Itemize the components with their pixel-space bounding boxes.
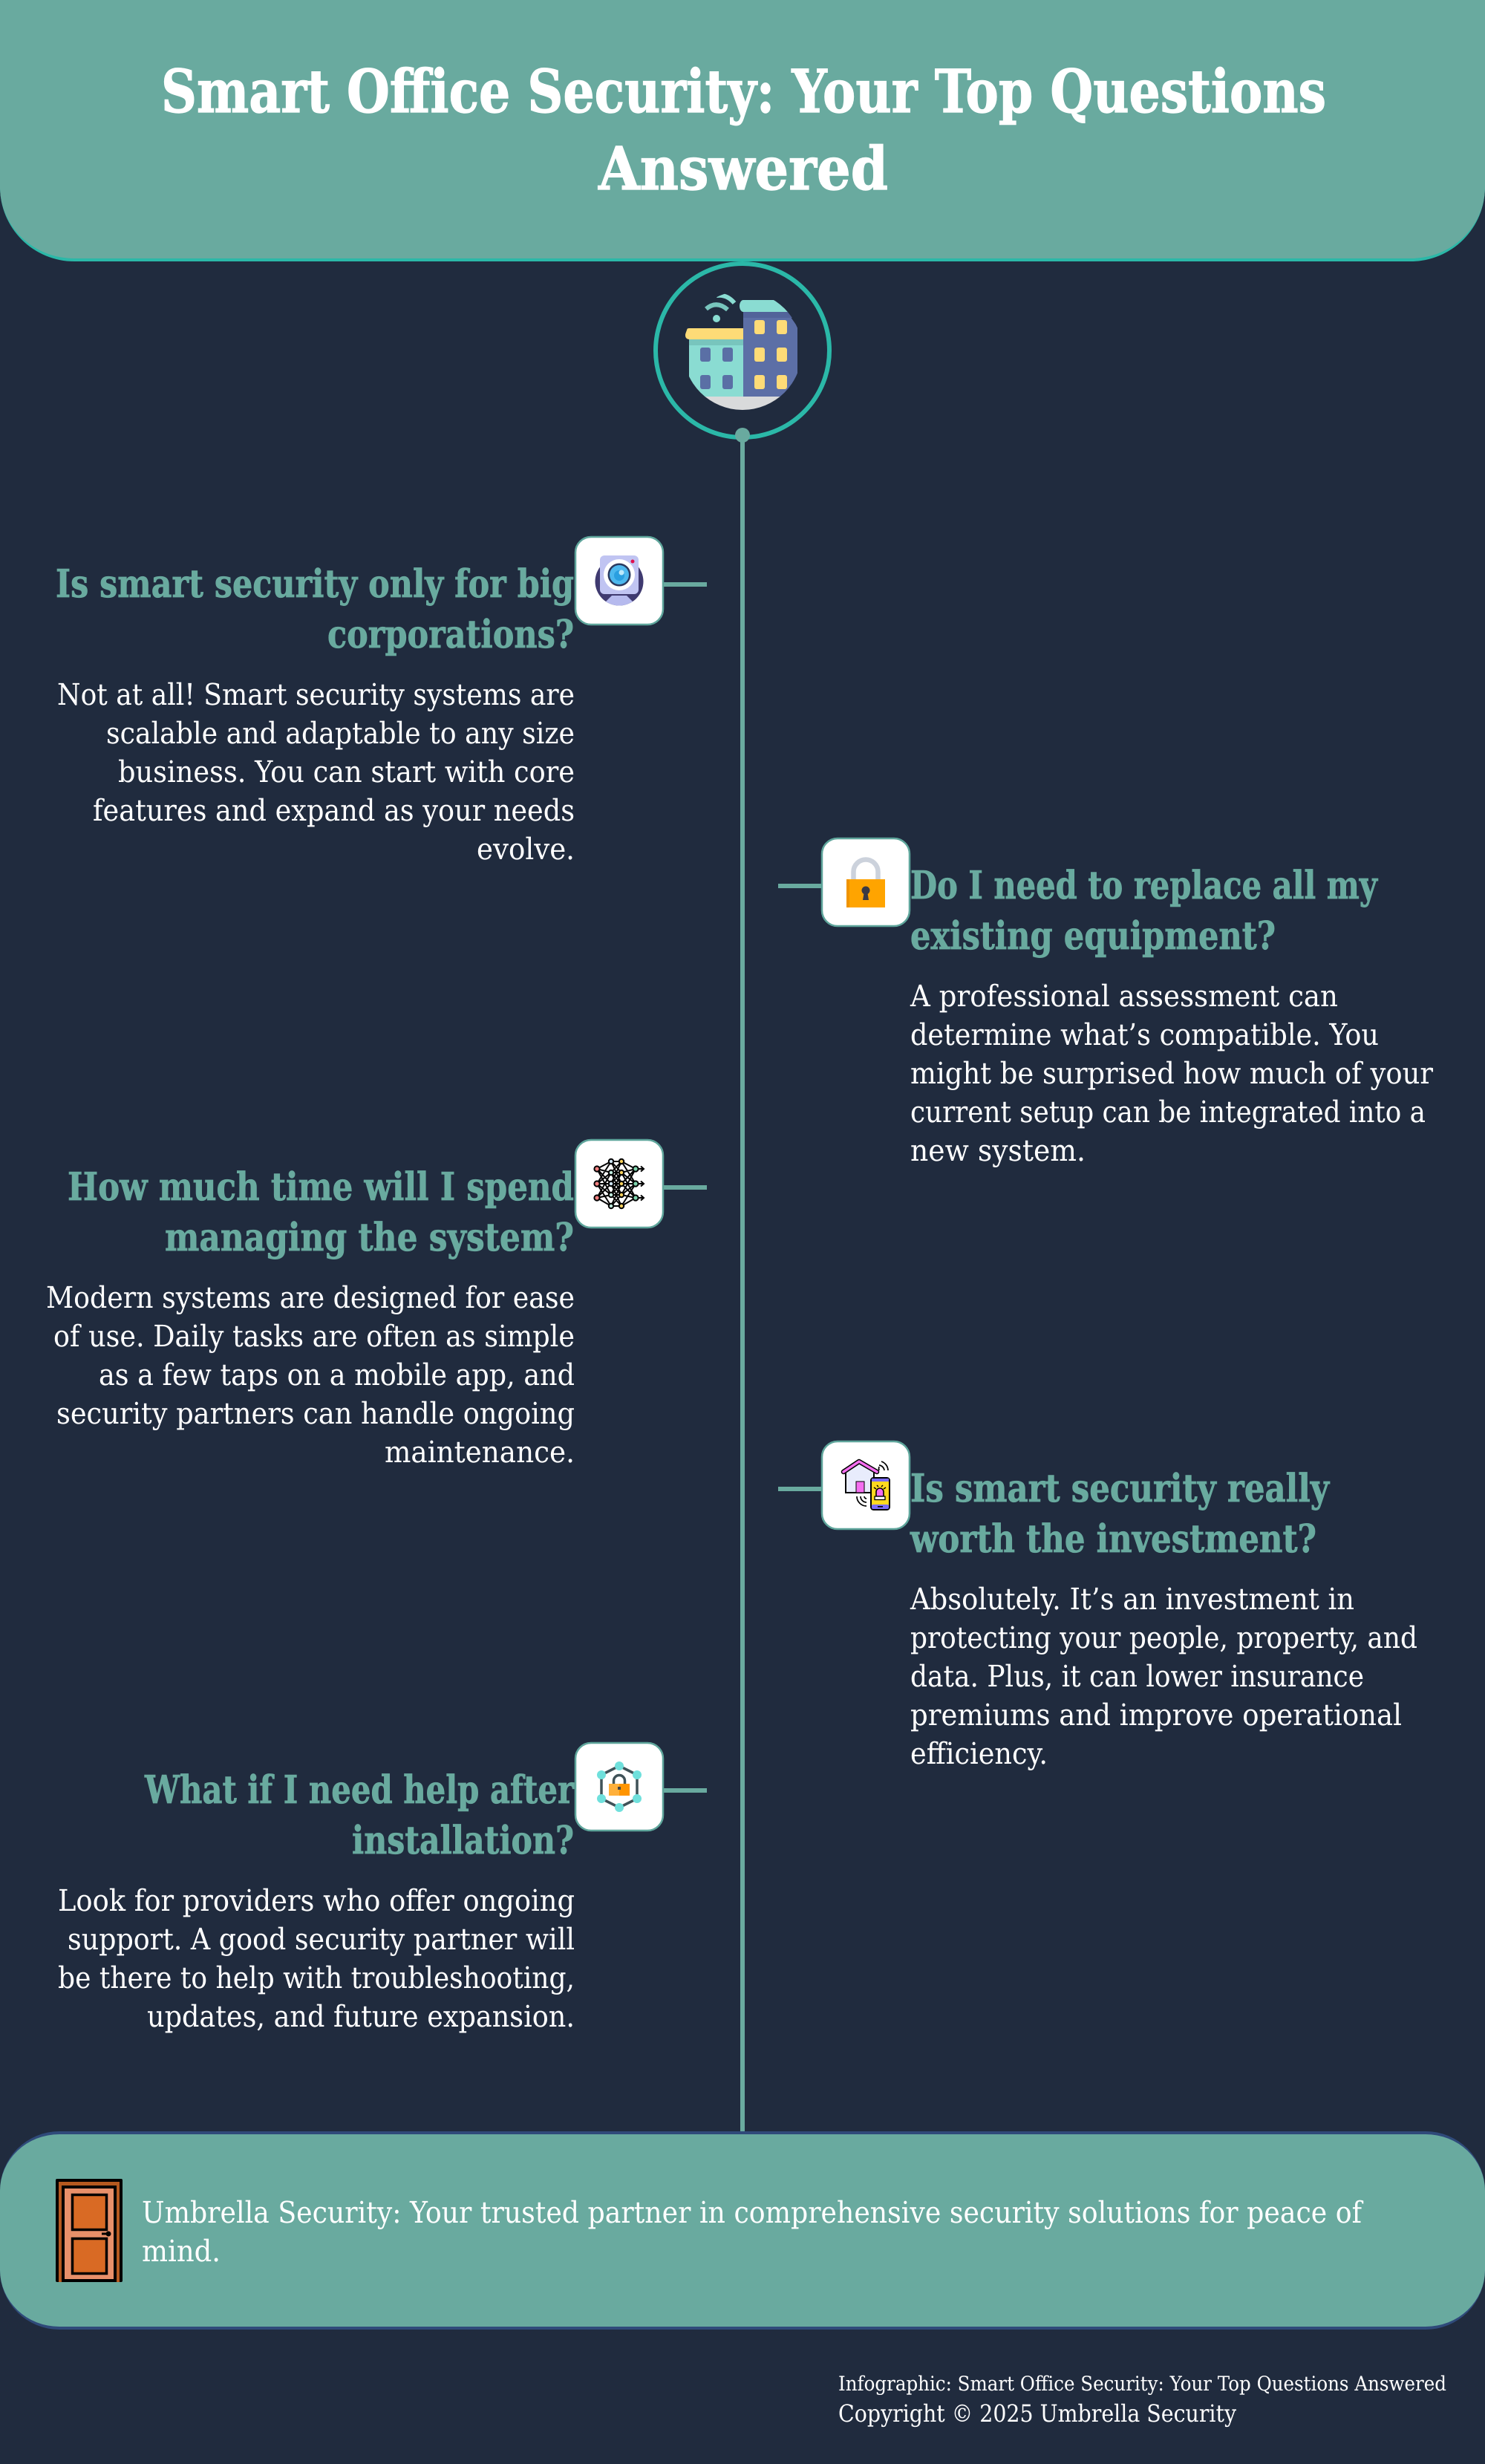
answer text: business. You can start with core [118,755,575,789]
answer text: premiums and improve operational [910,1698,1402,1733]
answer text: security partners can handle ongoing [56,1397,575,1431]
question heading [910,1466,1330,1562]
answer text: support. A good security partner will [68,1923,575,1957]
icon: network lock [575,1743,707,1831]
footer text: mind. [142,2235,221,2269]
answer text: Look for providers who offer ongoing [58,1884,575,1918]
answer text: determine what’s compatible. You [910,1018,1379,1052]
answer text: A professional assessment can [910,980,1338,1014]
question heading [910,863,1378,959]
title [161,56,1326,203]
question heading: Is smart security only for big [56,561,574,607]
panel: big corporations question [56,537,707,867]
question heading: What if I need help after [144,1767,574,1813]
question heading: existing equipment? [910,913,1276,959]
copyright credit: Copyright © 2025 Umbrella Security [838,2399,1236,2428]
question heading [144,1767,574,1863]
title: Answered [598,134,888,203]
question heading: installation? [352,1818,574,1863]
answer text: Not at all! Smart security systems are [57,678,575,712]
footer banner [0,2131,1485,2330]
answer text: Modern systems are designed for ease [46,1281,575,1315]
panel: investment question [778,1441,1417,1771]
panel: help after installation question [58,1743,707,2034]
answer text: new system. [910,1134,1086,1168]
footer text [142,2196,1364,2269]
answer text: features and expand as your needs [93,794,575,828]
question heading: Is smart security really [910,1466,1330,1511]
question heading: How much time will I spend [68,1164,574,1210]
icon: neural network [575,1140,707,1228]
answer text [910,1583,1417,1771]
answer text [57,678,575,867]
answer text: of use. Daily tasks are often as simple [53,1320,575,1354]
question heading: Do I need to replace all my [910,863,1378,908]
answer text: maintenance. [385,1435,575,1470]
answer text: updates, and future expansion. [147,2000,575,2034]
answer text: scalable and adaptable to any size [106,717,575,751]
answer text: Absolutely. It’s an investment in [910,1583,1354,1617]
question heading: managing the system? [165,1215,574,1260]
answer text [910,980,1434,1168]
icon: smart building in ring [656,264,829,443]
panel: managing time question [46,1140,707,1470]
answer text: evolve. [477,832,575,867]
icon: padlock [778,838,910,926]
footer text: Umbrella Security: Your trusted partner in comprehensive security solutions for peace of [142,2196,1364,2230]
question heading [56,561,574,657]
question heading: worth the investment? [910,1516,1316,1562]
header banner [0,0,1485,261]
answer text: protecting your people, property, and [910,1621,1417,1655]
answer text: might be surprised how much of your [910,1057,1434,1091]
panel: replace equipment question [778,838,1434,1168]
answer text [58,1884,575,2034]
copyright credit [838,2373,1446,2428]
icon: security camera [575,537,707,625]
icon: door [56,2179,123,2282]
icon: home alarm phone [778,1441,910,1529]
answer text: efficiency. [910,1737,1048,1771]
answer text: be there to help with troubleshooting, [58,1961,575,1995]
answer text: as a few taps on a mobile app, and [99,1358,575,1392]
question heading: corporations? [327,612,574,657]
answer text [46,1281,575,1470]
answer text: current setup can be integrated into a [910,1095,1426,1130]
answer text: data. Plus, it can lower insurance [910,1660,1364,1694]
timeline line [740,435,745,2136]
question heading [68,1164,574,1260]
